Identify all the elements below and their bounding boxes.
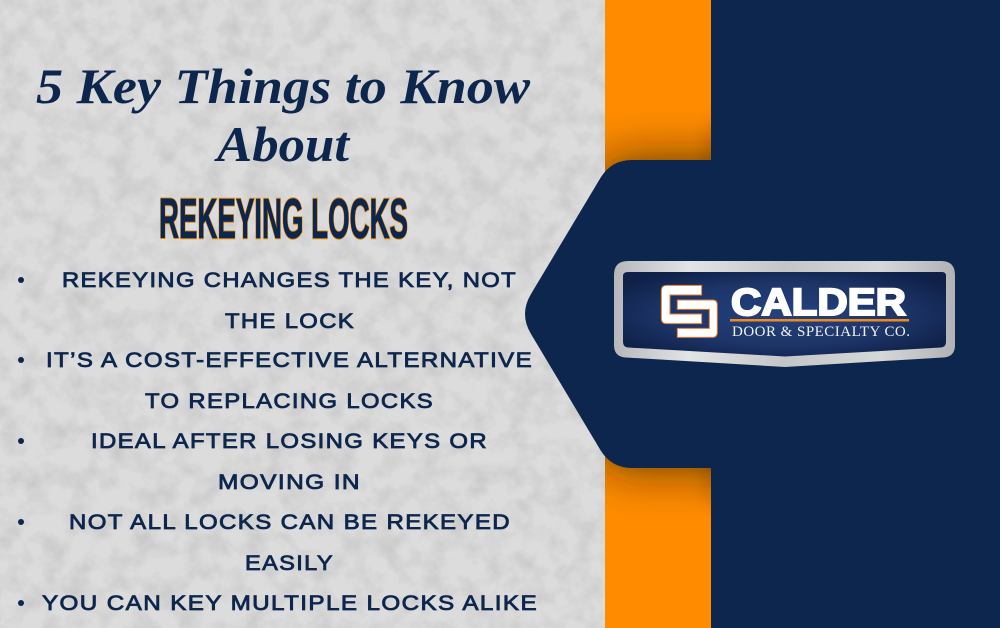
logo icon: CS monogram	[661, 285, 717, 337]
bullet item 4: NOT ALL LOCKS CAN BE REKEYED	[69, 511, 511, 534]
panel: orange vertical band	[605, 0, 711, 628]
subtitle: rekeying locks	[159, 187, 408, 251]
bullet item 1: REKEYING CHANGES THE KEY, NOT	[62, 269, 517, 292]
logo blue plate	[623, 272, 946, 356]
bullet item 2: IT’S A COST-EFFECTIVE ALTERNATIVE	[46, 349, 533, 372]
bullet item 5: YOU CAN KEY MULTIPLE LOCKS ALIKE	[42, 592, 538, 615]
bullet item 2: TO REPLACING LOCKS	[145, 390, 434, 413]
bullet item 1	[18, 269, 517, 333]
logo wordmark: CALDER	[731, 282, 906, 324]
bullet item 4	[18, 511, 511, 575]
bullet list	[18, 269, 538, 615]
bullet item 3	[18, 430, 488, 494]
text: REKEYING LOCKS	[159, 187, 408, 251]
logo: Calder Door & Specialty Co.	[614, 261, 955, 367]
bullet item 1: THE LOCK	[225, 310, 355, 333]
bullet item 2	[18, 349, 533, 413]
text: REKEYING LOCKS	[159, 187, 408, 251]
bullet item 3: MOVING IN	[218, 471, 361, 494]
bullet item 3: IDEAL AFTER LOSING KEYS OR	[91, 430, 488, 453]
title: About	[214, 116, 351, 172]
logo tagline: DOOR & SPECIALTY CO.	[732, 324, 910, 340]
bullet item 4: EASILY	[245, 552, 334, 575]
panel: navy right side	[711, 0, 1000, 628]
panel: navy arrow shape	[525, 160, 712, 468]
logo orange rule	[730, 319, 909, 322]
logo silver frame	[614, 261, 955, 367]
title: 5 Key Things to Know	[36, 58, 531, 114]
panel: textured grey background	[0, 0, 605, 628]
title	[36, 58, 531, 172]
